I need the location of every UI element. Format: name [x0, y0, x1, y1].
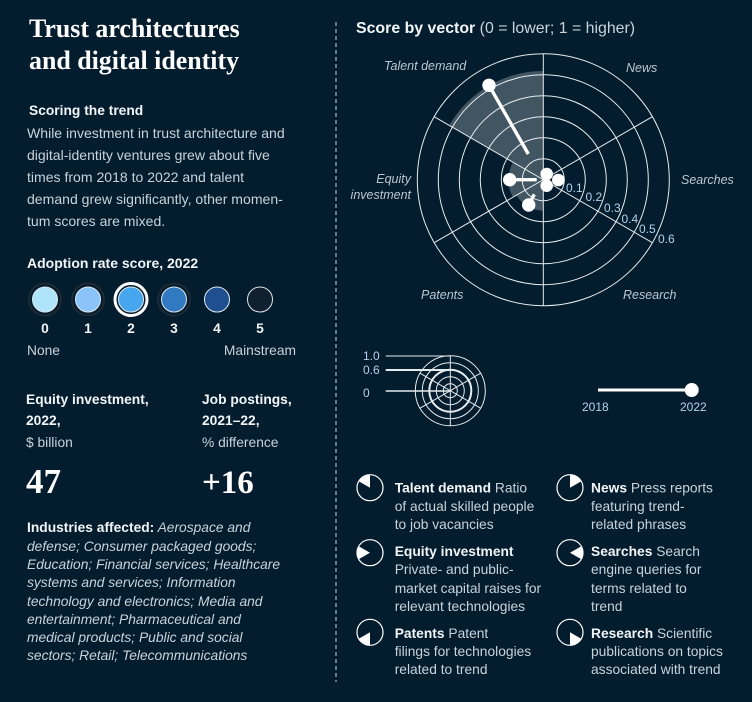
legend: equity investment: Equity investment: [395, 544, 514, 559]
legend: patents: [357, 619, 531, 677]
heading: scoring the trend: Scoring the trend: [29, 103, 143, 118]
shaded score area: [449, 71, 543, 211]
adoption rate score scale: 2: [127, 321, 135, 336]
legend: equity investment: [357, 540, 542, 614]
legend: talent demand: [357, 475, 535, 532]
stat: equity investment: 47: [26, 462, 61, 501]
section: scoring the trend: [27, 103, 285, 229]
adoption rate score scale: 0: [41, 321, 49, 336]
scale labels: 0.3: [604, 201, 621, 215]
text block: industries affected: sectors; Retail; Telecommunications: [27, 648, 247, 663]
legend: [357, 475, 723, 677]
adoption rate score scale: 4: [213, 321, 221, 336]
legend: patents: Patents Patent: [395, 626, 488, 641]
text block: trend description: [27, 125, 285, 229]
title: Trust architectures: [29, 14, 240, 43]
title: [29, 14, 240, 75]
text block: industries affected: medical products; Public and social: [27, 630, 243, 645]
radar chart: [351, 54, 734, 306]
stat: job postings: 2021–22,: [202, 413, 260, 428]
scale labels: 0.4: [622, 212, 639, 226]
sector labels: [351, 59, 734, 302]
timeline key: [582, 383, 707, 414]
heading: score by vector: Score by vector (0 = lower; 1 = higher): [356, 20, 635, 37]
heading: adoption rate: Adoption rate score, 2022: [27, 255, 198, 271]
radar key: [363, 349, 485, 426]
sector labels: investment: [351, 188, 412, 202]
legend: searches: terms related to: [591, 581, 687, 596]
adoption rate score scale: Mainstream: [224, 343, 296, 358]
text block: industries affected: systems and services; Information: [27, 575, 236, 590]
adoption rate score scale: None: [27, 343, 60, 358]
adoption rate score scale: 5: [256, 321, 264, 336]
sector labels: Talent demand: [384, 59, 467, 73]
selected score marker: [115, 284, 147, 316]
legend: searches: engine queries for: [591, 562, 702, 577]
legend: research: publications on topics: [591, 644, 723, 659]
rings and spokes: [417, 54, 669, 306]
sector labels: News: [626, 61, 657, 75]
scale labels: [566, 181, 675, 246]
legend: talent demand: Talent demand Ratio: [395, 480, 527, 496]
legend: searches: [557, 540, 702, 614]
text block: trend description: digital-identity ventures grew about five: [27, 147, 270, 163]
legend: patents: filings for technologies: [395, 644, 531, 659]
timeline key: 2022: [680, 400, 707, 414]
text block: industries affected: [27, 520, 280, 663]
stat: equity investment: [26, 392, 149, 501]
legend: news: featuring trend-: [591, 499, 685, 514]
sector labels: Research: [623, 288, 677, 302]
text block: industries affected: defense; Consumer packaged goods;: [27, 539, 256, 554]
legend: equity investment: relevant technologies: [395, 599, 525, 614]
legend: searches: Searches Search: [591, 544, 700, 559]
title: and digital identity: [29, 46, 239, 75]
sector labels: Equity: [376, 172, 412, 186]
legend: equity investment: market capital raises for: [395, 581, 542, 596]
scale labels: 0.5: [639, 222, 656, 236]
scale labels: 0.2: [586, 190, 603, 204]
timeline key: 2018: [582, 400, 609, 414]
adoption rate score scale: [27, 255, 296, 358]
legend: talent demand: of actual skilled people: [395, 499, 535, 514]
legend: patents: related to trend: [395, 662, 488, 677]
legend: research: associated with trend: [591, 662, 721, 677]
text block: industries affected: Industries affected: Aerospace and: [27, 520, 252, 535]
sector labels: Searches: [681, 173, 734, 187]
radar key: 1.0: [363, 349, 380, 363]
legend: searches: trend: [591, 599, 622, 614]
adoption rate score scale: 1: [84, 321, 92, 336]
text block: trend description: tum scores are mixed.: [27, 213, 165, 229]
stat: job postings: [202, 392, 292, 501]
sector labels: Patents: [421, 288, 463, 302]
legend: talent demand: to job vacancies: [395, 517, 494, 532]
legend: news: [557, 475, 713, 532]
scale labels: 0.1: [566, 181, 583, 195]
adoption rate score scale: 3: [170, 321, 178, 336]
stat: equity investment: Equity investment,: [26, 392, 149, 407]
legend: news: News Press reports: [591, 480, 713, 496]
text block: industries affected: technology and electronics; Media and: [27, 594, 264, 609]
text block: industries affected: Education; Financial services; Healthcare: [27, 557, 280, 572]
text block: industries affected: entertainment; Pharmaceutical and: [27, 612, 242, 627]
legend: research: Research Scientific: [591, 626, 712, 641]
legend: news: related phrases: [591, 517, 686, 532]
stat: equity investment: 2022,: [26, 413, 61, 428]
stat: equity investment: $ billion: [26, 435, 73, 450]
radar key: 0.6: [363, 363, 380, 377]
text block: trend description: demand grew significantly, other momen-: [27, 191, 283, 207]
legend: research: [557, 619, 723, 677]
stat: job postings: +16: [202, 465, 254, 501]
radar key: 0: [363, 386, 370, 400]
stat: job postings: % difference: [202, 435, 279, 450]
score lines and dots: [482, 79, 565, 212]
scale labels: 0.6: [658, 232, 675, 246]
stat: job postings: Job postings,: [202, 392, 292, 407]
text block: trend description: times from 2018 to 2022 and talent: [27, 169, 244, 185]
legend: equity investment: Private- and public-: [395, 562, 514, 577]
text block: trend description: While investment in trust architecture and: [27, 125, 285, 141]
